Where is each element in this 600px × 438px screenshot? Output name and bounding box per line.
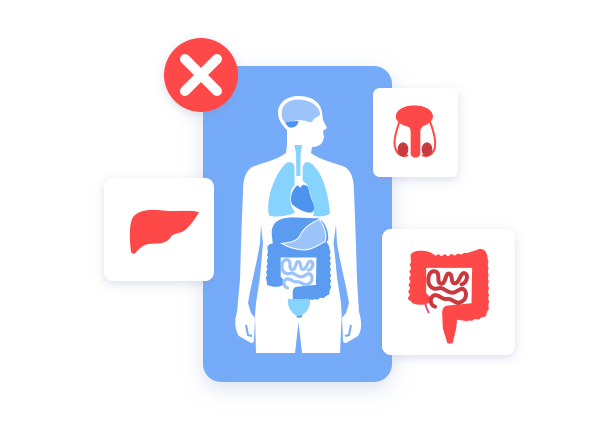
panel: blue body background (203, 66, 392, 382)
card: liver (104, 178, 214, 281)
card: reproductive organs (373, 88, 458, 177)
liver backdrop (272, 217, 328, 248)
appendix (425, 302, 429, 313)
body silhouette (235, 96, 361, 353)
outer ducts (395, 120, 435, 156)
right lung (303, 162, 330, 216)
icon: prostate and testes (395, 105, 435, 158)
colon (410, 250, 487, 342)
thumb notches (246, 325, 351, 336)
brain (282, 100, 320, 122)
heart (291, 185, 314, 213)
colon (blue) (268, 243, 329, 316)
icon: large and small intestine (410, 250, 487, 342)
icon: liver (130, 210, 199, 254)
small intestine (blue) (282, 260, 313, 288)
small intestine (428, 271, 467, 307)
left lung (268, 162, 295, 216)
bladder (288, 299, 310, 318)
icon: red cross badge (164, 38, 238, 112)
card: colon (382, 229, 515, 355)
colon scallops (410, 252, 487, 319)
upper organs group (268, 100, 330, 216)
stomach (282, 219, 326, 250)
trachea (294, 145, 302, 176)
cerebellum (285, 121, 298, 128)
